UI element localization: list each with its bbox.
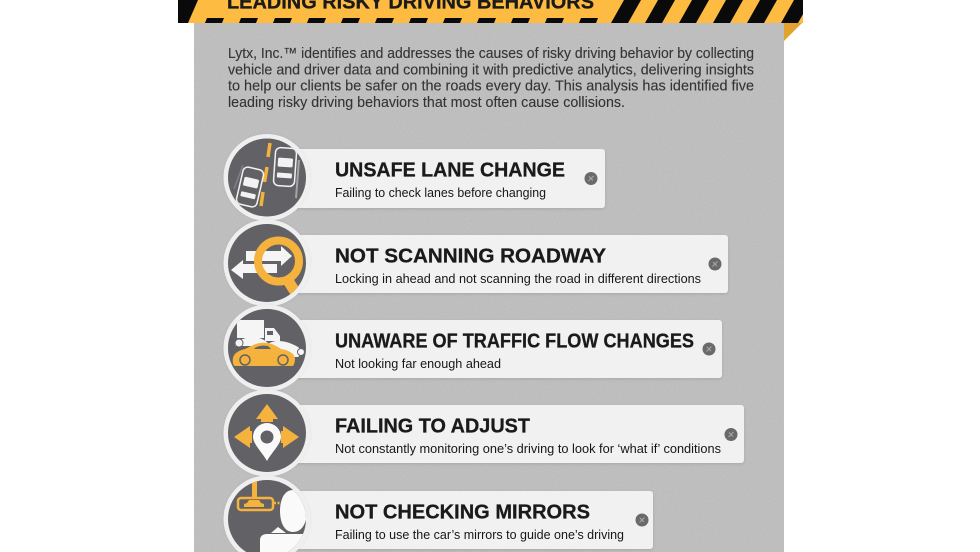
card	[290, 320, 722, 378]
heading: FAILING TO ADJUST	[335, 414, 530, 438]
description: Failing to use the car’s mirrors to guide one’s driving	[335, 527, 624, 542]
heading: UNSAFE LANE CHANGE	[335, 158, 565, 182]
card	[290, 149, 605, 208]
close icon	[584, 172, 598, 185]
close icon	[702, 342, 716, 356]
card	[290, 235, 728, 293]
full-height stripes	[611, 0, 811, 23]
description: Not constantly monitoring one’s driving to look for ‘what if’ conditions	[335, 441, 721, 456]
bottom dashes	[205, 18, 598, 23]
close icon	[636, 514, 648, 526]
card	[290, 491, 653, 549]
intro paragraph: vehicle and driver data and combining it with predictive analytics, delivering insights	[228, 62, 754, 78]
intro paragraph: leading risky driving behaviors that most often cause collisions.	[228, 95, 625, 111]
close icon	[708, 258, 722, 270]
icon: traffic	[224, 304, 310, 392]
heading: NOT CHECKING MIRRORS	[335, 500, 590, 524]
close icon	[724, 428, 738, 441]
description: Not looking far enough ahead	[335, 356, 501, 371]
row 3: unaware of traffic flow changes	[224, 304, 722, 392]
icon: two cars changing lanes	[224, 134, 310, 221]
icon: location pin with arrows	[224, 390, 310, 476]
row 2: not scanning roadway	[224, 220, 728, 306]
intro paragraph: to help our clients be safer on the roads every day. This analysis has identified five	[228, 78, 754, 94]
heading: UNAWARE OF TRAFFIC FLOW CHANGES	[335, 330, 694, 352]
card	[290, 405, 744, 463]
heading: NOT SCANNING ROADWAY	[335, 244, 606, 268]
description: Locking in ahead and not scanning the road in different directions	[335, 271, 701, 286]
icon: magnifier over arrows	[224, 220, 310, 306]
intro paragraph: Lytx, Inc.™ identifies and addresses the causes of risky driving behavior by collecting	[228, 46, 754, 62]
description: Failing to check lanes before changing	[335, 185, 546, 200]
banner fold	[784, 20, 803, 41]
row 4: failing to adjust	[224, 390, 744, 476]
row 1: unsafe lane change	[224, 134, 605, 221]
panel: grey background	[194, 23, 784, 552]
row 5: not checking mirrors	[224, 476, 653, 552]
banner: hazard stripes	[178, 0, 811, 23]
icon: driver and rear-view mirror	[224, 476, 310, 552]
intro paragraph	[228, 46, 754, 111]
